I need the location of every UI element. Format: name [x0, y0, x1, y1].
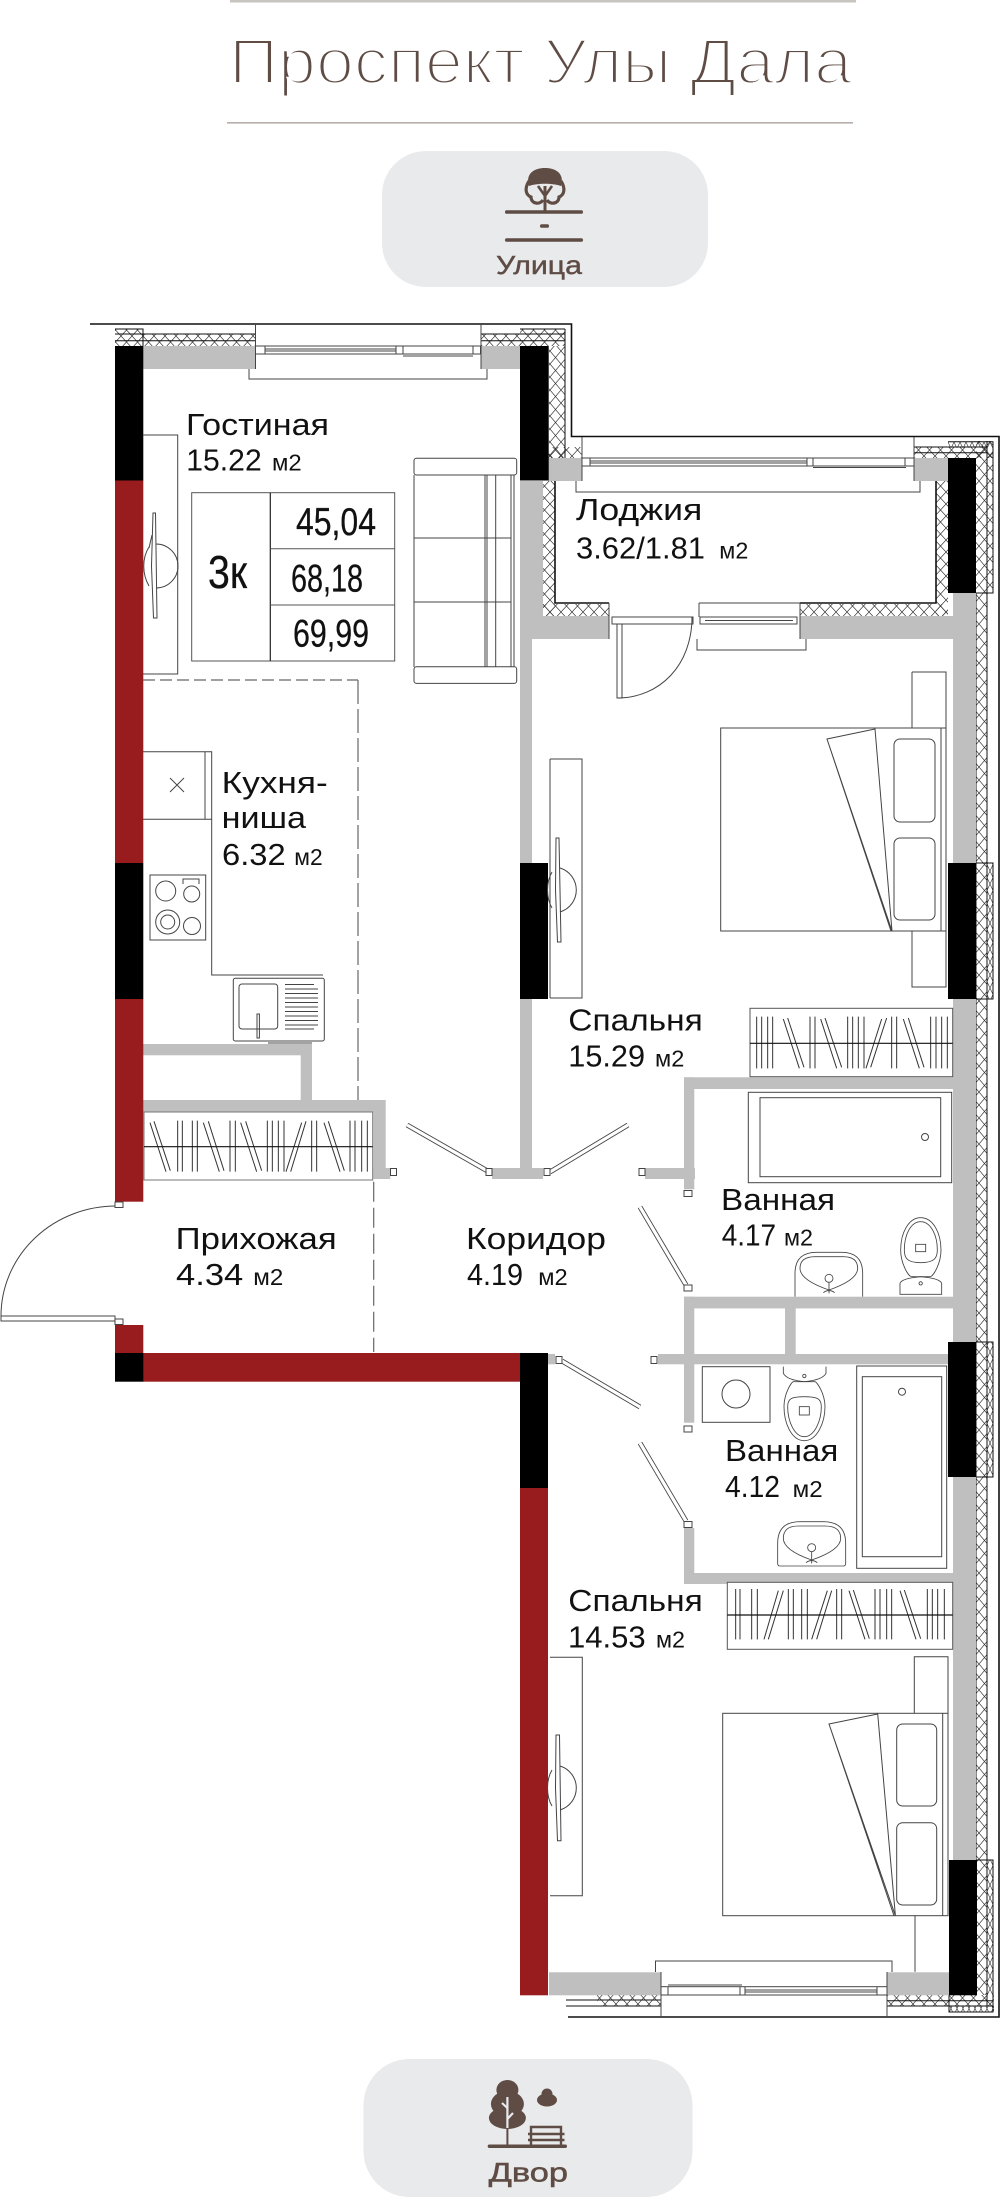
load-bearing walls: red	[115, 480, 548, 1995]
load-bearing walls: black columns	[115, 346, 977, 1995]
washbasin 1	[795, 1252, 863, 1297]
icon: street tree	[505, 168, 583, 242]
bathroom 2 fixtures	[702, 1366, 947, 1568]
room label: bedroom 2	[568, 1583, 703, 1654]
room label: kitchen: м2	[294, 844, 323, 870]
window: bottom bedroom	[656, 1961, 892, 2017]
kitchen units	[143, 752, 324, 1043]
room label: kitchen: ниша	[222, 800, 307, 835]
room label: bedroom 1: м2	[655, 1046, 684, 1072]
exterior insulation hatching	[115, 329, 994, 2012]
room label: loggia: м2	[719, 537, 748, 563]
bathtub 2	[857, 1366, 947, 1568]
room label: loggia: Лоджия	[576, 492, 702, 527]
room label: hallway: м2	[253, 1264, 283, 1290]
kitchen sink	[233, 978, 324, 1043]
dashed zone lines	[143, 680, 374, 1352]
room label: living room: Гостиная	[186, 407, 329, 442]
wardrobe: bedroom 2	[727, 1582, 953, 1649]
room label: hallway: 4.34	[176, 1257, 243, 1292]
washing machine	[702, 1367, 770, 1422]
room label: living room: 15.22	[186, 443, 262, 478]
window: living room	[249, 324, 487, 379]
interior partition walls	[143, 346, 976, 1995]
bed 1	[721, 672, 946, 987]
room label: bathroom 1: Ванная	[721, 1182, 835, 1217]
bathroom 1 fixtures	[748, 1092, 952, 1297]
room label: hallway	[176, 1221, 337, 1292]
window: loggia	[576, 437, 920, 492]
bedroom 2 furniture	[548, 1582, 953, 1972]
room count: 3к	[208, 546, 248, 598]
room label: kitchen: Кухня-	[222, 765, 328, 800]
area table	[192, 493, 395, 661]
room label: corridor: 4.19	[467, 1257, 523, 1292]
stove	[150, 875, 206, 940]
room label: bathroom 1: 4.17	[722, 1218, 776, 1253]
room label: bedroom 1: 15.29	[568, 1039, 645, 1074]
room label: bathroom 2: м2	[793, 1476, 823, 1502]
room label: bathroom 2	[725, 1433, 838, 1504]
bathtub 1	[748, 1092, 952, 1183]
toilet 2	[783, 1367, 826, 1441]
toilet 1	[900, 1218, 942, 1294]
icon: courtyard tree and bench	[488, 2080, 567, 2148]
TV unit: bedroom 1	[548, 759, 582, 998]
balcony door and window	[609, 603, 806, 698]
room label: kitchen: 6.32	[222, 837, 286, 872]
room label: bedroom 2: Спальня	[568, 1583, 703, 1618]
room label: bedroom 1	[568, 1003, 703, 1074]
total area: 68,18	[291, 558, 363, 601]
room label: loggia	[576, 492, 748, 565]
room label: bedroom 1: Спальня	[568, 1003, 703, 1038]
room label: hallway: Прихожая	[176, 1221, 337, 1256]
entrance door	[1, 1202, 123, 1324]
room label: bathroom 1: м2	[784, 1225, 813, 1251]
badge: courtyard	[364, 2059, 692, 2197]
room label: corridor	[466, 1221, 606, 1292]
room label: corridor: Коридор	[466, 1221, 606, 1256]
TV unit: bedroom 2	[548, 1657, 582, 1896]
wardrobe: bedroom 1	[750, 1008, 953, 1077]
room label: living room	[186, 407, 329, 478]
label: courtyard: Двор	[489, 2158, 568, 2188]
area with loggia: 69,99	[293, 613, 369, 656]
living area: 45,04	[296, 501, 376, 544]
room label: kitchen	[222, 765, 328, 872]
bedroom 1 furniture	[548, 672, 953, 1077]
room label: loggia: 3.62/1.81	[576, 530, 705, 565]
sofa	[414, 458, 517, 683]
exterior outline	[90, 324, 999, 2017]
badge: street	[382, 151, 708, 287]
washbasin 2	[778, 1522, 846, 1566]
title: Проспект Улы Дала	[229, 26, 852, 98]
room label: bathroom 2: 4.12	[725, 1469, 780, 1504]
room label: living room: м2	[272, 450, 302, 476]
room label: bathroom 2: Ванная	[725, 1433, 838, 1468]
room label: bedroom 2: м2	[656, 1626, 685, 1652]
TV unit: living room	[143, 435, 178, 674]
loggia inner outline	[555, 481, 936, 603]
label: street: Улица	[496, 250, 583, 280]
interior door leaves	[390, 1125, 692, 1528]
room label: corridor: м2	[538, 1264, 568, 1290]
bed 2	[723, 1657, 948, 1972]
room label: bedroom 2: 14.53	[568, 1619, 646, 1654]
wardrobe: hallway	[144, 1112, 373, 1180]
room label: bathroom 1	[721, 1182, 835, 1253]
floor plan	[1, 324, 999, 2017]
